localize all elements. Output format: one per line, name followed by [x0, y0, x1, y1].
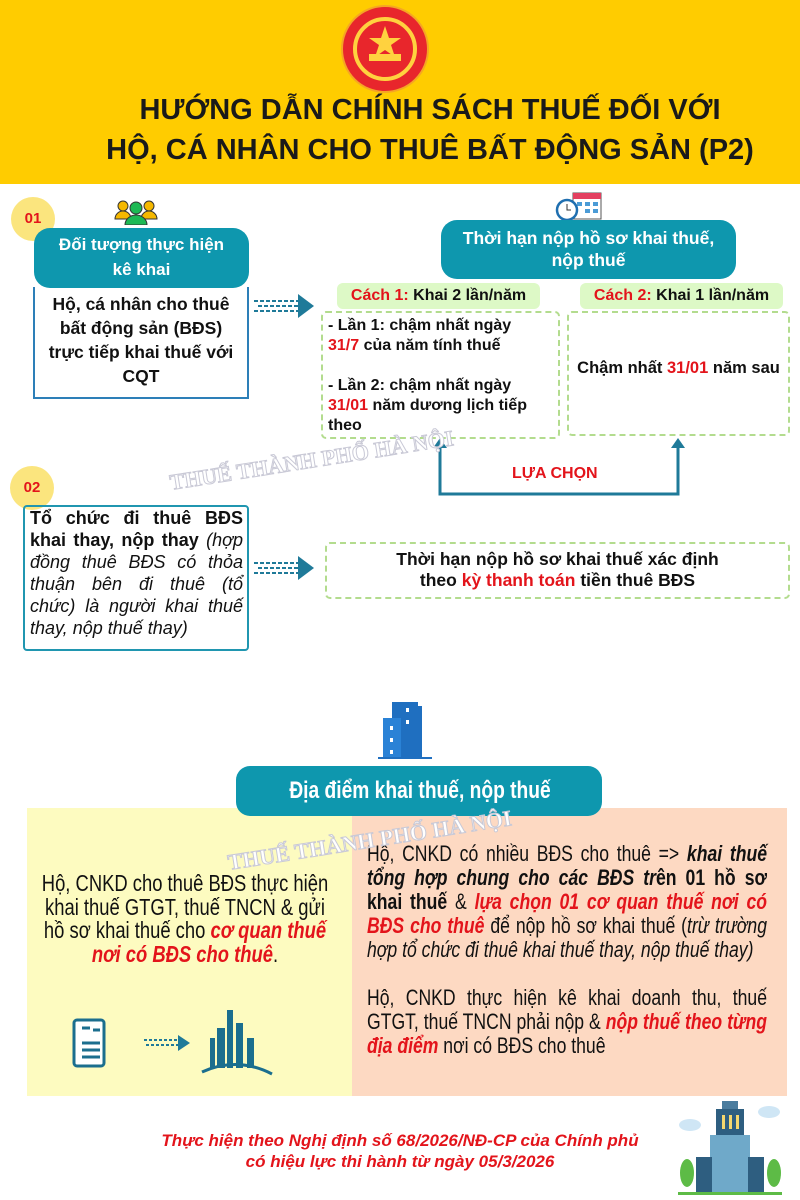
label: Cach 1: Cách 1: Khai 2 lần/năm	[351, 287, 526, 304]
box: payment period	[325, 542, 790, 599]
badge 02	[10, 466, 54, 510]
icon: people	[114, 200, 158, 225]
icon: document to building	[72, 1010, 273, 1076]
arrow 1	[254, 294, 314, 318]
heading: location: Địa điểm khai thuế, nộp thuế	[289, 777, 551, 804]
badge 01: 01	[25, 210, 41, 227]
label: lua chon: LỰA CHỌN	[512, 465, 598, 482]
box: cach 1 details	[321, 311, 560, 439]
title	[106, 93, 754, 166]
label: Cach 2	[580, 283, 783, 309]
text: left location: Hộ, CNKD cho thuê BĐS thực hiện khai thuế GTGT, thuế TNCN & gửi hồ sơ khai thuế cho cơ quan thuế nơi có BĐS cho thuê.	[42, 870, 328, 966]
panel: left location (yellow)	[27, 808, 352, 1096]
panel: right location (peach)	[352, 808, 787, 1096]
footer note	[161, 1131, 639, 1171]
title: HƯỚNG DẪN CHÍNH SÁCH THUẾ ĐỐI VỚI	[139, 94, 721, 126]
label: Cach 1	[337, 283, 540, 309]
icon: calendar clock	[556, 192, 602, 220]
box: cach 1 details: 31/01 năm dương lịch tiếp	[328, 397, 527, 414]
heading: location	[236, 766, 602, 816]
arrows: choice	[434, 438, 685, 496]
panel 01 heading: Đối tượng thực hiện	[59, 235, 224, 254]
icon: building	[378, 702, 432, 759]
box: payment period: Thời hạn nộp hồ sơ khai thuế xác định	[396, 549, 719, 569]
header band	[0, 0, 800, 184]
box: cach 2 details: Chậm nhất 31/01 năm sau	[577, 359, 780, 377]
panel 01 body: Hộ, cá nhân cho thuê bất động sản (BĐS) trực tiếp khai thuế với CQT	[49, 294, 233, 386]
footer note: có hiệu lực thi hành từ ngày 05/3/2026	[246, 1152, 554, 1171]
box: cach 1 details: - Lần 1: chậm nhất ngày	[328, 317, 511, 334]
footer note: Thực hiện theo Nghị định số 68/2026/NĐ-CP của Chính phủ	[161, 1131, 639, 1150]
panel 01 heading: kê khai	[113, 260, 170, 279]
title: HỘ, CÁ NHÂN CHO THUÊ BẤT ĐỘNG SẢN (P2)	[106, 134, 754, 166]
panel 01 heading	[34, 228, 249, 288]
badge 02: 02	[24, 479, 40, 496]
text: right location	[367, 841, 768, 1058]
text: multiple properties: Hộ, CNKD có nhiều BĐS cho thuê => khai thuế tổng hợp chung cho các BĐS trên 01 hồ sơ khai thuế & lựa chọn 01 cơ quan thuế nơi có BĐS cho thuê để nộp hồ sơ khai thuế (trừ trường hợp tổ chức đi thuê khai thuế thay, nộp thuế thay)	[367, 841, 767, 962]
icon: tower with trees	[678, 1101, 782, 1195]
badge 01	[11, 197, 55, 241]
panel: deadlines heading: nộp thuế	[552, 250, 625, 270]
text: per location: Hộ, CNKD thực hiện kê khai doanh thu, thuế GTGT, thuế TNCN phải nộp & nộp thuế theo từng địa điểm nơi có BĐS cho thuê	[367, 985, 767, 1058]
box: cach 1 details: theo	[328, 417, 362, 434]
box: cach 1 details: - Lần 2: chậm nhất ngày	[328, 377, 511, 394]
panel: deadlines heading: Thời hạn nộp hồ sơ khai thuế,	[463, 228, 714, 248]
watermark: THUẾ THÀNH PHỐ HÀ NỘI	[168, 425, 455, 495]
arrow 2	[254, 556, 314, 580]
panel: deadlines heading	[441, 220, 736, 279]
box: cach 1 details: 31/7 của năm tính thuế	[328, 337, 500, 354]
watermark 2: THUẾ THÀNH PHỐ HÀ NỘI	[226, 805, 513, 875]
logo	[341, 5, 429, 93]
panel 02: Tổ chức đi thuê BĐS khai thay, nộp thay (hợp đồng thuê BĐS có thỏa thuận bên đi thuê (tổ chức) là người khai thuế thay, nộp thuế thay)	[30, 508, 243, 638]
box: payment period: theo kỳ thanh toán tiền thuê BĐS	[420, 570, 695, 590]
box: cach 2 details	[567, 311, 790, 436]
label: Cach 2: Cách 2: Khai 1 lần/năm	[594, 287, 769, 304]
